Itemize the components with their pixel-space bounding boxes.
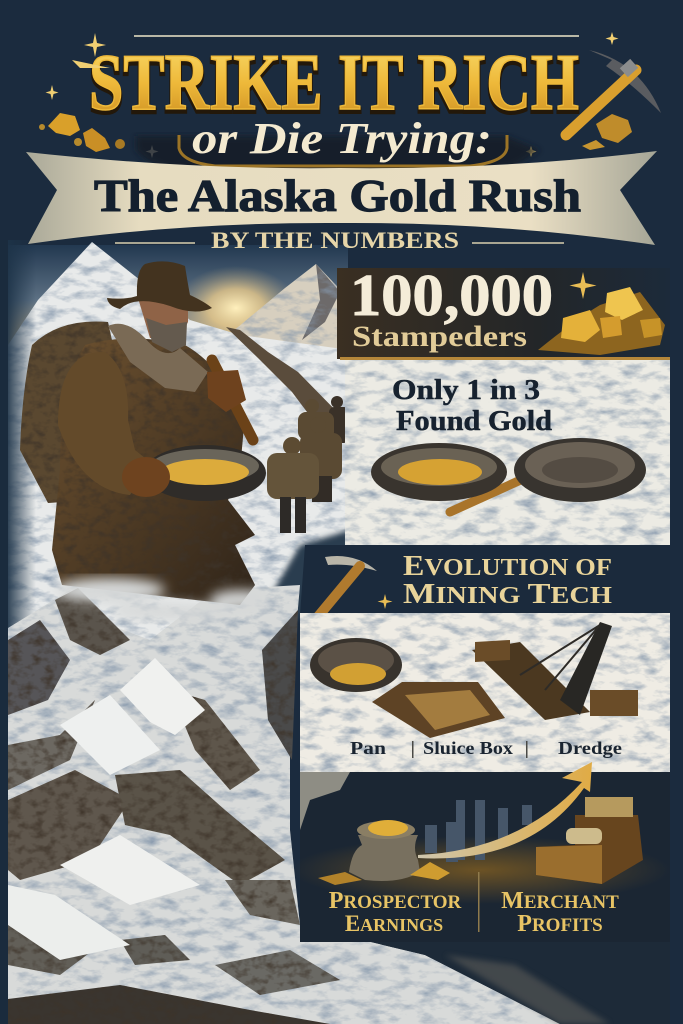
icon: pickaxe top right <box>566 50 661 150</box>
top rule <box>134 35 579 37</box>
foreground hiker <box>267 437 319 533</box>
banner title: The Alaska Gold Rush <box>94 170 581 221</box>
arm <box>58 352 150 495</box>
prospector figure <box>20 261 270 620</box>
title banner <box>26 114 657 245</box>
left blue haze <box>8 240 36 640</box>
stars <box>46 32 618 158</box>
backpack <box>20 321 125 503</box>
tech labels: Sluice Box <box>423 738 513 758</box>
label: prospector earnings: PROSPECTOR <box>329 888 462 914</box>
panel: 100,000 stampeders <box>337 262 670 360</box>
header ornaments <box>39 32 661 158</box>
stat label: Stampeders <box>352 320 527 353</box>
icon: pickaxe <box>316 556 377 619</box>
by the numbers strip: BY THE NUMBERS <box>211 228 459 253</box>
coat <box>52 338 255 605</box>
dark side borders <box>0 240 8 1024</box>
snow spray <box>55 578 270 620</box>
sky <box>8 245 348 345</box>
snowy rock corner <box>300 772 350 830</box>
sparkle <box>378 594 392 609</box>
beard <box>146 318 187 352</box>
icon: cash register <box>536 797 643 884</box>
label: prospector earnings: EARNINGS <box>345 911 443 936</box>
arrow: growth <box>418 762 592 858</box>
icon: empty pan <box>514 438 646 502</box>
stat text: Found Gold <box>396 405 552 437</box>
icon: sluice box <box>372 682 505 738</box>
pick handle <box>212 360 253 440</box>
lower mountains <box>0 585 560 1024</box>
subtitle: or Die Trying: <box>192 114 492 163</box>
gloved hand on handle <box>207 370 246 412</box>
snowfield behind figure <box>8 242 350 660</box>
icon: pan <box>310 638 402 692</box>
label: merchant profits: MERCHANT <box>501 888 619 914</box>
panel: only 1 in 3 found gold <box>345 360 670 545</box>
line of stampeders <box>226 327 349 533</box>
glove <box>122 457 170 497</box>
snow scene background <box>0 240 683 1024</box>
subtitle recess <box>136 135 540 172</box>
sun glow <box>174 266 298 350</box>
distant peak <box>232 264 350 360</box>
shadow corner by the tech panel <box>268 530 350 620</box>
middle hikers <box>298 399 342 502</box>
label: prospector earnings <box>329 888 462 936</box>
sparkle <box>570 272 596 299</box>
label: merchant profits: PROFITS <box>517 911 603 937</box>
heading <box>403 550 612 610</box>
label: merchant profits <box>501 888 619 937</box>
panel: mining tech illustration <box>300 613 670 772</box>
tech labels: Pan <box>350 738 386 758</box>
background bars <box>425 800 532 862</box>
right foreground snow patches <box>445 955 610 1024</box>
tech labels: Dredge <box>558 738 622 758</box>
icon: pan with gold <box>371 443 525 512</box>
gold pan <box>144 445 266 501</box>
stat text <box>392 374 552 437</box>
icon: dredge <box>472 622 638 720</box>
heading: EVOLUTION OF <box>403 550 612 582</box>
icon: sack of gold <box>318 820 450 885</box>
stat text: Only 1 in 3 <box>392 374 540 406</box>
tech labels <box>350 738 622 758</box>
icon: gold nuggets left <box>39 113 125 152</box>
face <box>138 298 188 338</box>
panel: evolution of mining tech <box>300 545 670 619</box>
ground glow <box>290 836 670 904</box>
fur collar <box>108 324 208 392</box>
right foreground dark ground <box>300 925 683 1024</box>
hat <box>107 261 212 312</box>
far hiker <box>329 396 349 443</box>
heading: MINING TECH <box>403 578 612 610</box>
stat number: 100,000 <box>350 262 553 328</box>
panel: earnings vs profits <box>290 762 670 942</box>
icon: gold pile <box>538 287 665 355</box>
